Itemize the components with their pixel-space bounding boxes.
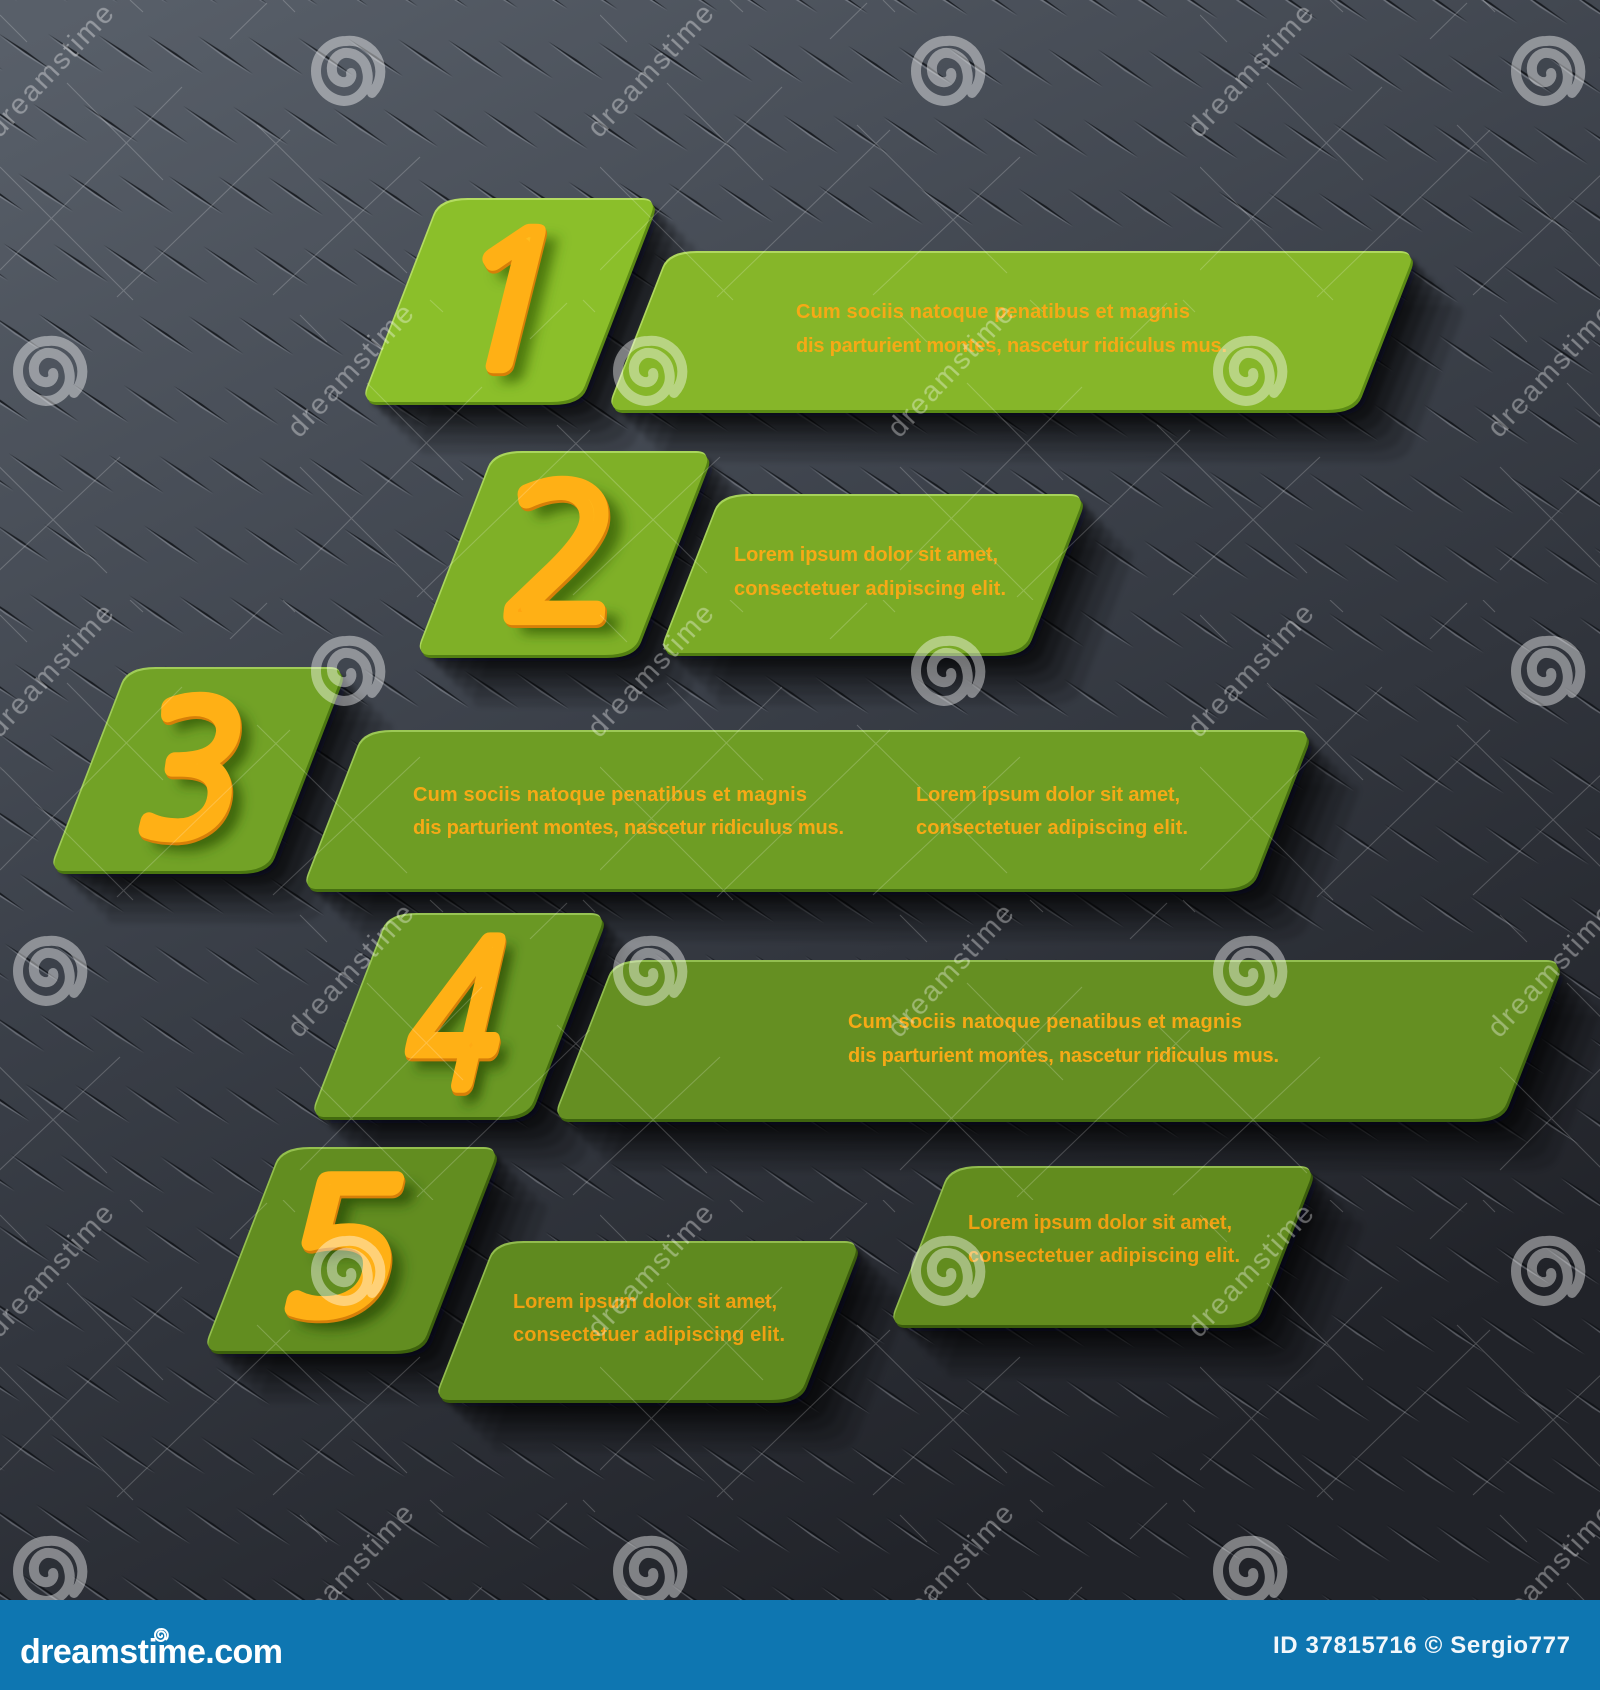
digit 1: 1: [430, 213, 591, 396]
text block 5a: Lorem ipsum dolor sit amet,: [513, 1291, 777, 1313]
digit 2: 2: [496, 464, 626, 644]
text bar 3: [306, 730, 1309, 892]
digit 5: 5: [265, 1158, 422, 1339]
text block 3 left: dis parturient montes, nascetur ridiculus mus.: [413, 817, 844, 839]
watermark overlay: dreamstime: [1181, 1198, 1320, 1344]
panel shadows: [60, 206, 1600, 1452]
watermark overlay: dreamstime: [1181, 598, 1320, 744]
icon: logo spiral: [155, 1629, 168, 1641]
text bar 2: [663, 494, 1083, 656]
text block 3 left: Cum sociis natoque penatibus et magnis: [413, 784, 807, 806]
footer banner: [0, 1600, 1600, 1690]
panel: step 1: [365, 198, 1413, 413]
text block 1: dis parturient montes, nascetur ridiculus mus.: [796, 335, 1227, 357]
text block 2: consectetuer adipiscing elit.: [734, 578, 1006, 600]
panel: step 3: [53, 667, 1309, 892]
text bar 4: [557, 960, 1560, 1122]
digit 5: 5: [267, 1161, 423, 1342]
panel: step 4: [314, 913, 1560, 1126]
watermark overlay: dreamstime: [281, 298, 420, 444]
digit 5: 5: [279, 1169, 435, 1350]
panel: step 5: [207, 1147, 1313, 1403]
watermark overlay: dreamstime: [881, 1498, 1020, 1644]
digit 4: 4: [400, 930, 538, 1126]
text bar 5a: [438, 1241, 858, 1403]
digit 2: 2: [498, 467, 628, 647]
watermark overlay: dreamstime: [581, 0, 720, 144]
watermark overlay: dreamstime: [581, 1198, 720, 1344]
watermark overlay: dreamstime: [881, 898, 1020, 1044]
watermark overlay: dreamstime: [281, 1498, 420, 1644]
text block 3 right: [916, 784, 1188, 839]
number tile 1: [365, 198, 655, 405]
text block 2: Lorem ipsum dolor sit amet,: [734, 544, 998, 566]
watermark overlay: dreamstime: [1181, 0, 1320, 144]
text block 5b: Lorem ipsum dolor sit amet,: [968, 1212, 1232, 1234]
text block 2: [734, 544, 1006, 600]
text block 1: [796, 301, 1227, 357]
text block 3 right: consectetuer adipiscing elit.: [916, 817, 1188, 839]
text block 4: dis parturient montes, nascetur ridiculus mus.: [848, 1045, 1279, 1067]
text block 5b: consectetuer adipiscing elit.: [968, 1245, 1240, 1267]
text block 3 left: [413, 784, 844, 839]
text bar 5b: [893, 1166, 1313, 1328]
digit 3: 3: [131, 683, 258, 864]
digit 4: 4: [390, 918, 528, 1114]
logo wordmark: dreamstime.com: [20, 1633, 283, 1671]
number tile 3: [53, 667, 343, 874]
text block 4: Cum sociis natoque penatibus et magnis: [848, 1011, 1242, 1033]
digit 3: 3: [142, 692, 269, 872]
text block 5a: [513, 1291, 785, 1346]
text block 1: Cum sociis natoque penatibus et magnis: [796, 301, 1190, 323]
digit 3: 3: [130, 680, 256, 861]
digit 2: 2: [512, 475, 642, 655]
panel: step 2: [420, 451, 1083, 658]
text bar 1: [611, 251, 1413, 413]
number tile 5: [207, 1147, 497, 1354]
watermark overlay: dreamstime: [581, 598, 720, 744]
number tile 4: [314, 913, 604, 1120]
text block 5a: consectetuer adipiscing elit.: [513, 1324, 785, 1346]
text block 3 right: Lorem ipsum dolor sit amet,: [916, 784, 1180, 806]
number tile 2: [420, 451, 709, 658]
text block 4: [848, 1011, 1279, 1067]
text block 5b: [968, 1212, 1240, 1267]
watermark overlay: dreamstime: [881, 298, 1020, 444]
digit 4: 4: [391, 921, 529, 1117]
image id and credit: ID 37815716 © Sergio777: [1273, 1632, 1570, 1659]
digit 1: 1: [429, 211, 589, 393]
digit 1: 1: [442, 222, 602, 405]
watermark overlay: dreamstime: [281, 898, 420, 1044]
